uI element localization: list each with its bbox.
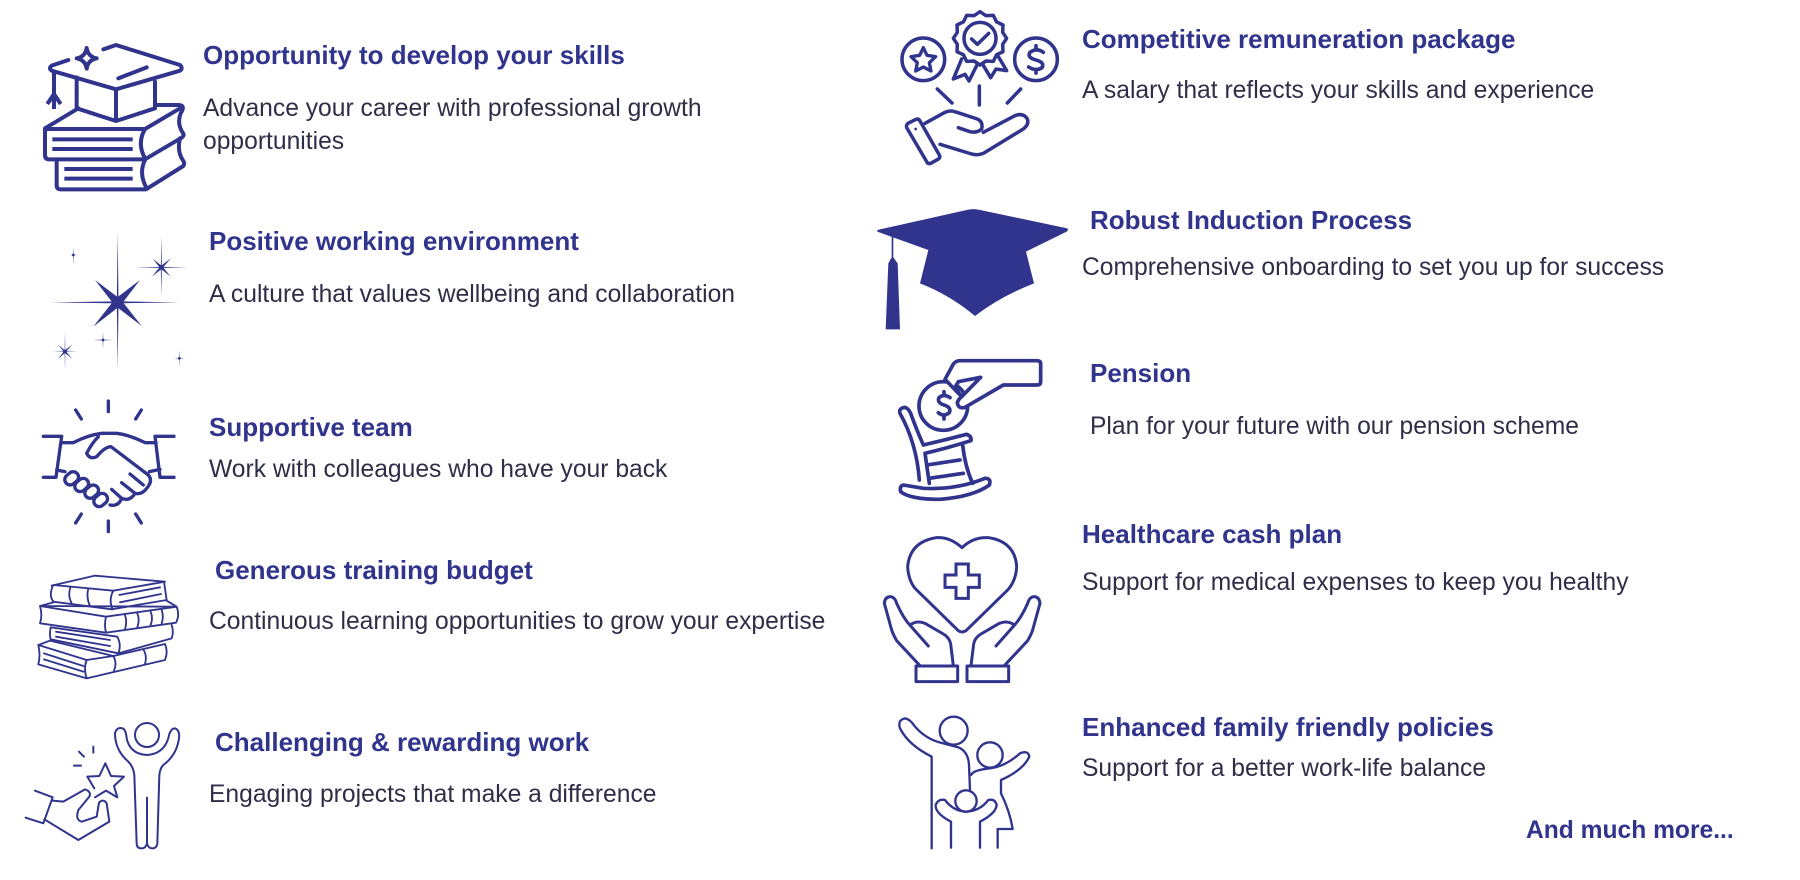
heading: Enhanced family friendly policies bbox=[1082, 712, 1494, 742]
panel: competitive remuneration package bbox=[902, 12, 1594, 164]
icon: family bbox=[899, 717, 1029, 848]
icon: awards over open hand bbox=[902, 12, 1057, 164]
description: Plan for your future with our pension scheme bbox=[1090, 413, 1579, 440]
description: opportunities bbox=[203, 128, 344, 155]
icon: graduation cap on books bbox=[45, 45, 184, 189]
heading: Challenging & rewarding work bbox=[215, 727, 590, 757]
icon: solid graduation cap bbox=[877, 209, 1068, 329]
icon: person with star and hand bbox=[26, 723, 179, 848]
heading: Competitive remuneration package bbox=[1082, 24, 1515, 54]
panel: positive working environment bbox=[50, 226, 735, 370]
description: Advance your career with professional growth bbox=[203, 95, 702, 122]
description: Support for a better work-life balance bbox=[1082, 755, 1486, 782]
icon: stack of books bbox=[38, 576, 178, 678]
panel: generous training budget bbox=[38, 555, 825, 678]
description: A salary that reflects your skills and experience bbox=[1082, 77, 1594, 104]
heading: Opportunity to develop your skills bbox=[203, 40, 625, 70]
description: Comprehensive onboarding to set you up for success bbox=[1082, 254, 1664, 281]
heading: Supportive team bbox=[209, 412, 413, 442]
panel: healthcare cash plan bbox=[884, 519, 1629, 682]
heading: Pension bbox=[1090, 358, 1191, 388]
heading: Generous training budget bbox=[215, 555, 533, 585]
icon: coin dropped onto rocking chair bbox=[900, 361, 1041, 499]
description: Continuous learning opportunities to grow your expertise bbox=[209, 608, 825, 635]
panel: pension bbox=[900, 358, 1579, 499]
panel: supportive team bbox=[43, 401, 668, 532]
closing note: And much more... bbox=[1526, 817, 1734, 844]
description: A culture that values wellbeing and collaboration bbox=[209, 281, 735, 308]
panel: opportunity to develop your skills bbox=[45, 40, 702, 189]
heading: Positive working environment bbox=[209, 226, 579, 256]
description: Support for medical expenses to keep you healthy bbox=[1082, 569, 1629, 596]
icon: sparkles bbox=[50, 232, 188, 370]
panel: robust induction process bbox=[877, 205, 1664, 329]
description: Work with colleagues who have your back bbox=[209, 456, 668, 483]
panel: challenging and rewarding work bbox=[26, 723, 656, 848]
icon: handshake bbox=[43, 401, 174, 532]
heading: Healthcare cash plan bbox=[1082, 519, 1342, 549]
icon: heart with cross in hands bbox=[884, 538, 1040, 682]
heading: Robust Induction Process bbox=[1090, 205, 1412, 235]
panel: enhanced family friendly policies bbox=[899, 712, 1494, 848]
description: Engaging projects that make a difference bbox=[209, 781, 656, 808]
